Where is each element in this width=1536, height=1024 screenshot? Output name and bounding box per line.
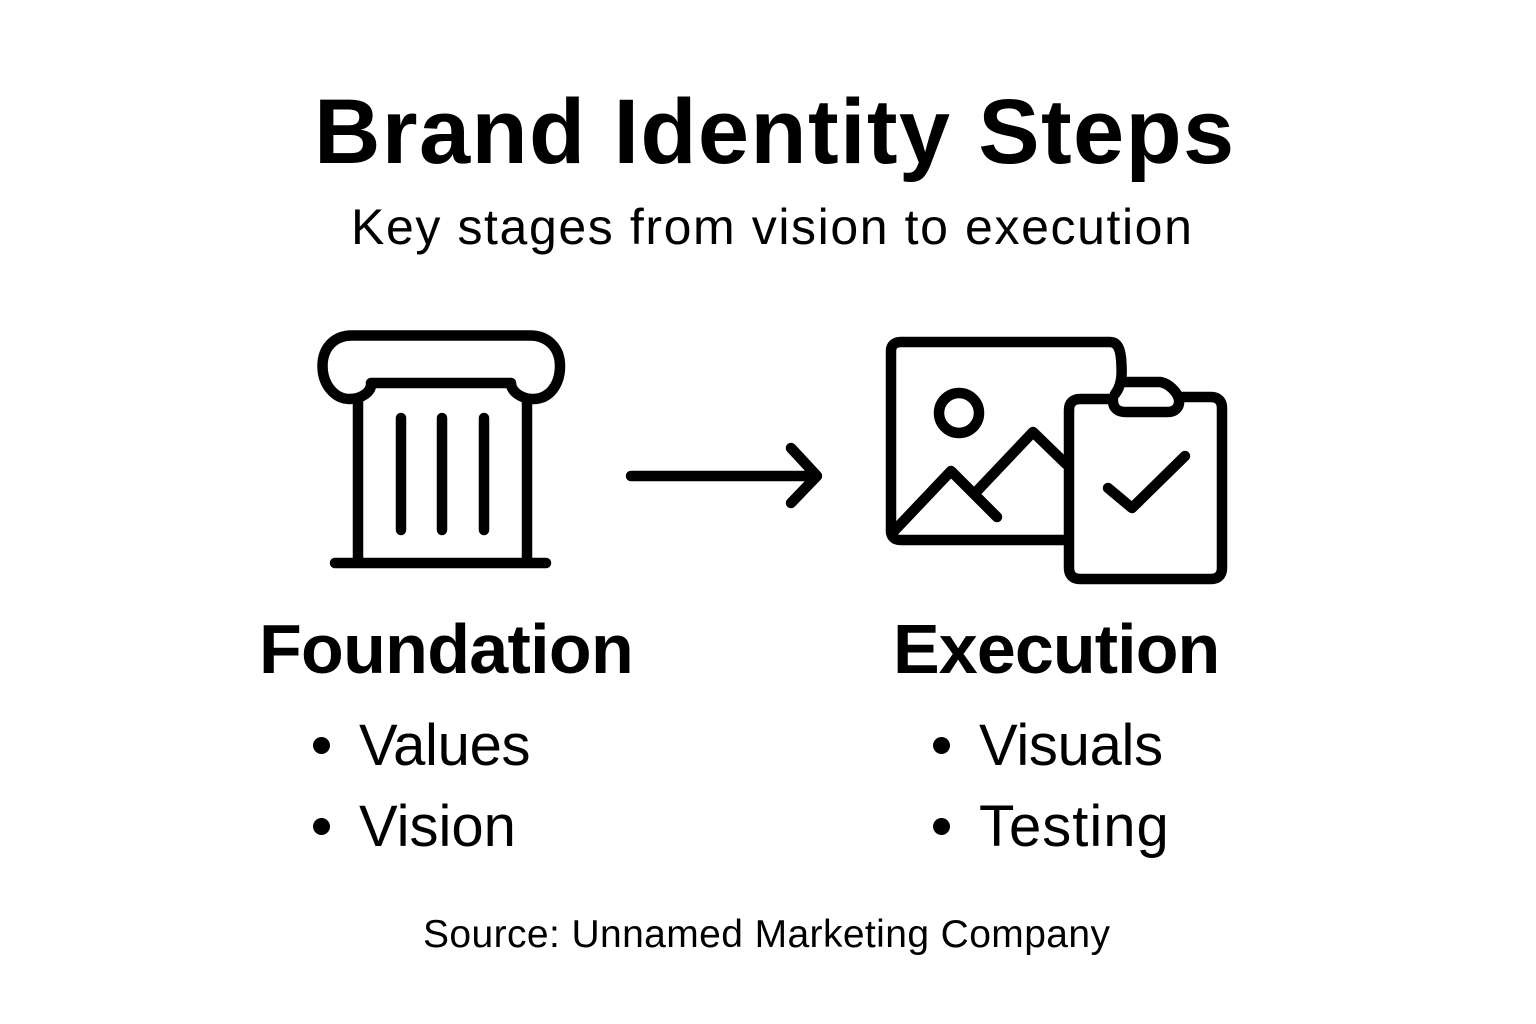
bullet xyxy=(932,737,950,754)
icon: column xyxy=(322,336,560,563)
item: vision: Vision xyxy=(359,794,516,859)
title: Brand Identity Steps xyxy=(314,81,1236,183)
item: testing: Testing xyxy=(979,794,1170,859)
clipboard board xyxy=(1069,397,1222,579)
bullet xyxy=(312,737,330,754)
item: visuals: Visuals xyxy=(979,713,1163,778)
clipboard check xyxy=(1108,456,1185,508)
icon: image and clipboard xyxy=(891,342,1222,579)
arrow xyxy=(631,448,817,503)
item: values: Values xyxy=(359,713,530,778)
bullet xyxy=(932,818,950,835)
subtitle: Key stages from vision to execution xyxy=(351,199,1194,255)
bullet xyxy=(312,818,330,835)
execution list xyxy=(933,713,1170,859)
image mountains xyxy=(895,432,1066,530)
clipboard clip xyxy=(1113,382,1179,412)
source note: Source: Unnamed Marketing Company xyxy=(423,913,1110,956)
heading: foundation: Foundation xyxy=(259,610,633,688)
image sun xyxy=(939,393,979,433)
heading: execution: Execution xyxy=(893,610,1219,688)
foundation list xyxy=(313,713,530,859)
image frame xyxy=(891,342,1122,540)
